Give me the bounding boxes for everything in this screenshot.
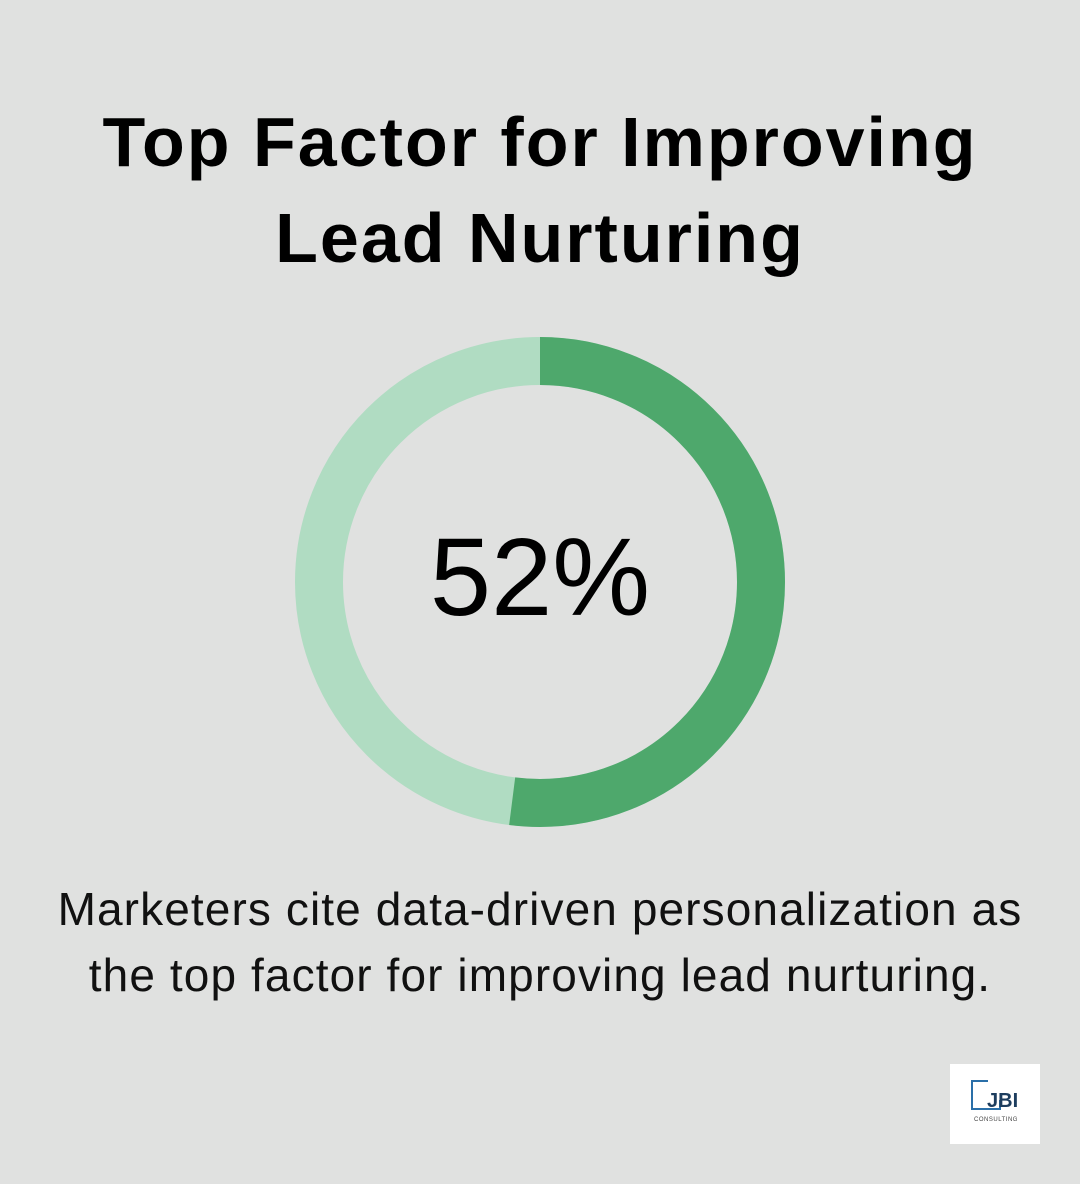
logo: JBI Consulting: CONSULTING bbox=[974, 1117, 1018, 1123]
description text bbox=[58, 883, 1022, 1001]
title bbox=[102, 103, 978, 277]
title: Lead Nurturing bbox=[275, 199, 805, 277]
donut value arc 52% bbox=[319, 361, 761, 803]
logo: JBI Consulting bbox=[950, 1064, 1040, 1144]
logo: JBI Consulting: JBI bbox=[987, 1090, 1018, 1112]
description text: the top factor for improving lead nurturing. bbox=[89, 949, 991, 1001]
donut background ring bbox=[319, 361, 761, 803]
center value: 52% bbox=[430, 516, 650, 639]
title: Top Factor for Improving bbox=[102, 103, 978, 181]
description text: Marketers cite data-driven personalization as bbox=[58, 883, 1022, 935]
